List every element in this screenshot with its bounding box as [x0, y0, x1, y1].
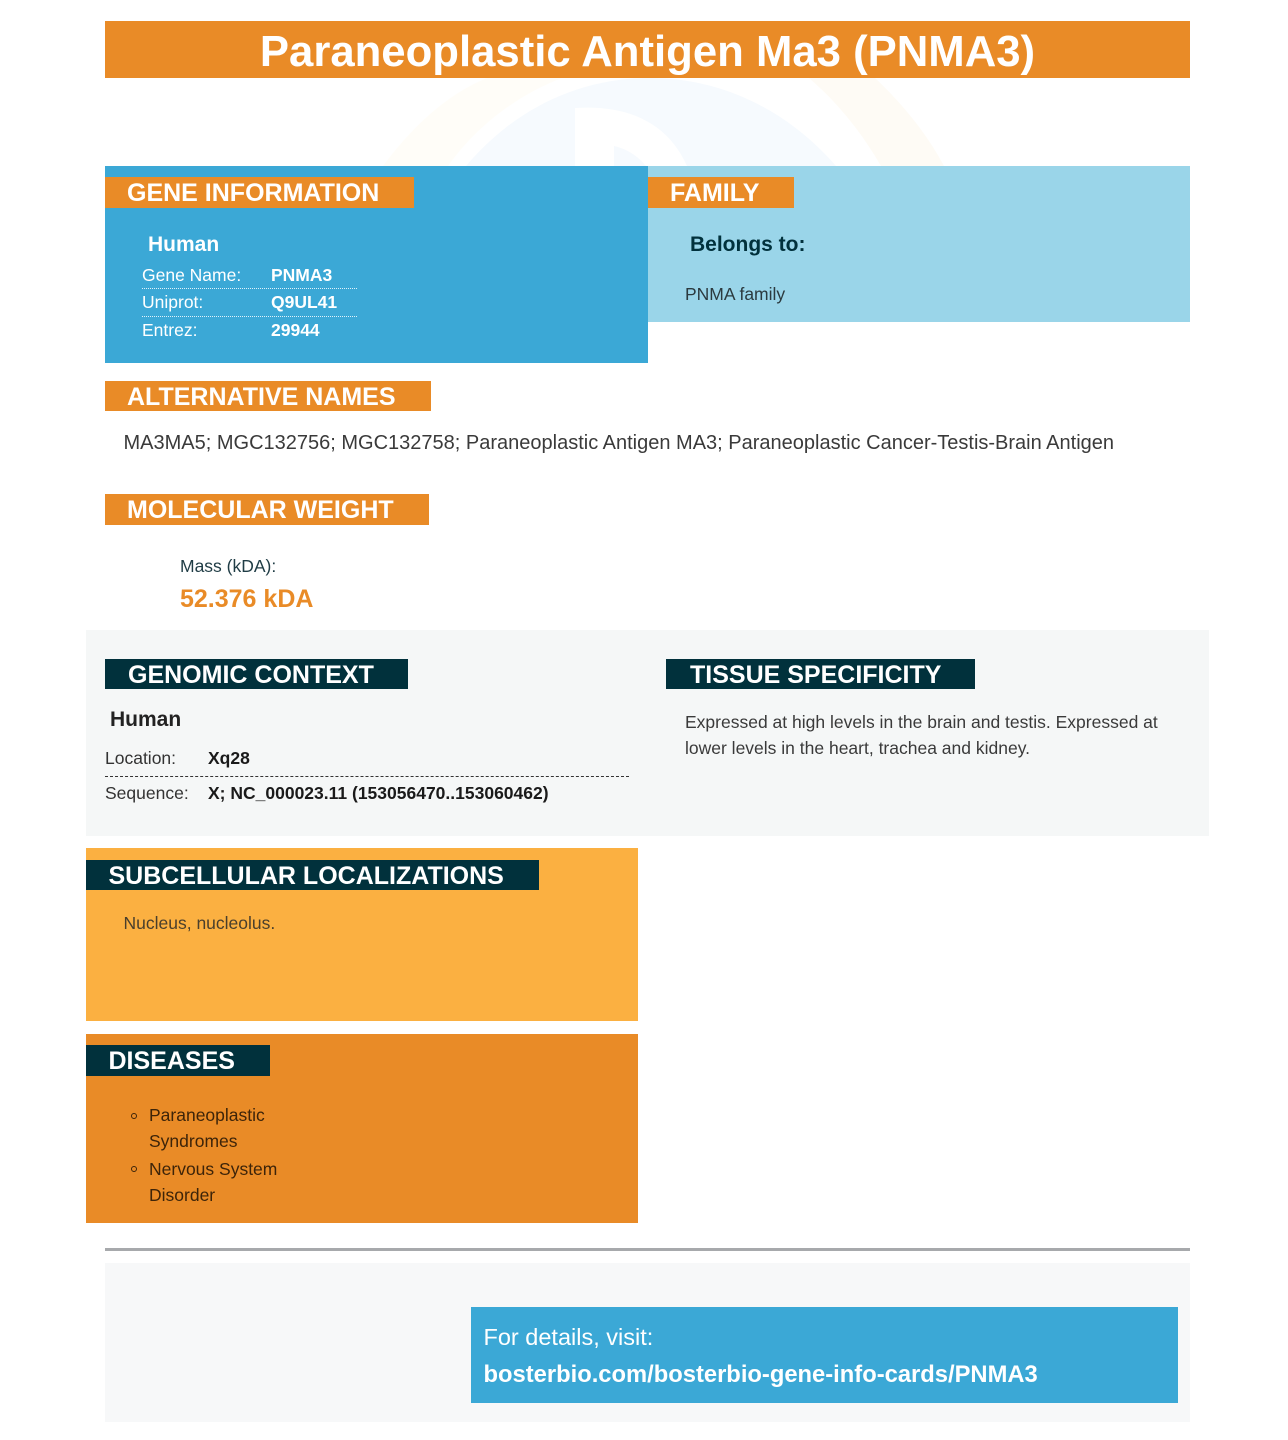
- genomic table: Location:: [105, 748, 176, 768]
- localization text: Nucleus, nucleolus.: [124, 913, 275, 933]
- mass label: Mass (kDA):: [180, 556, 276, 576]
- heading: diseases: DISEASES: [108, 1047, 235, 1075]
- gene info table: Q9UL41: [271, 292, 337, 312]
- panel: genomic context and tissue specificity: [86, 630, 1209, 836]
- footer panel: [105, 1263, 1190, 1422]
- heading: gene information: GENE INFORMATION: [127, 179, 379, 207]
- heading: subcellular localizations: SUBCELLULAR LOCALIZATIONS: [108, 862, 504, 890]
- disease item: Disorder: [149, 1185, 215, 1205]
- panel: gene information: [105, 166, 648, 363]
- tissue specificity text: lower levels in the heart, trachea and kidney.: [685, 738, 1030, 758]
- heading: tissue specificity: TISSUE SPECIFICITY: [690, 661, 941, 689]
- heading: diseases: [86, 1045, 270, 1076]
- tissue specificity text: [685, 712, 1158, 758]
- tissue specificity text: Expressed at high levels in the brain and testis. Expressed at: [685, 712, 1158, 732]
- alternative names text: MA3MA5; MGC132756; MGC132758; Paraneoplastic Antigen MA3; Paraneoplastic Cancer-Testis-Brain Antigen: [124, 432, 1114, 454]
- genomic table: [105, 748, 629, 803]
- title banner: [105, 21, 1190, 78]
- bullet: [131, 1166, 137, 1172]
- panel: subcellular localizations: [86, 848, 638, 1021]
- gene info table: [142, 265, 357, 340]
- species label: Human: [148, 233, 219, 256]
- gene info table: 29944: [271, 320, 320, 340]
- disease item: [149, 1159, 277, 1205]
- url: bosterbio.com/bosterbio-gene-info-cards/PNMA3: [484, 1361, 1038, 1388]
- belongs to label: Belongs to:: [690, 233, 806, 256]
- disease item: Syndromes: [149, 1131, 238, 1151]
- gene info table: Gene Name:: [142, 265, 241, 285]
- gene info table: Entrez:: [142, 320, 197, 340]
- disease list: [131, 1105, 277, 1205]
- disease item: [149, 1105, 265, 1151]
- disease item: Paraneoplastic: [149, 1105, 265, 1125]
- species label: Human: [110, 708, 181, 731]
- heading: molecular weight: MOLECULAR WEIGHT: [127, 496, 394, 524]
- genomic table: X; NC_000023.11 (153056470..153060462): [208, 783, 549, 803]
- heading: family: [648, 177, 794, 208]
- visit label: For details, visit:: [484, 1324, 653, 1350]
- gene info table: Uniprot:: [142, 292, 203, 312]
- heading: genomic context: GENOMIC CONTEXT: [128, 661, 374, 689]
- panel: diseases: [86, 1034, 638, 1223]
- mass value: 52.376 kDA: [180, 585, 313, 613]
- watermark logo: [466, 78, 944, 166]
- genomic table: Sequence:: [105, 783, 189, 803]
- bullet: [131, 1113, 137, 1119]
- disease item: Nervous System: [149, 1159, 277, 1179]
- heading: alternative names: ALTERNATIVE NAMES: [127, 383, 396, 411]
- title banner: Paraneoplastic Antigen Ma3 (PNMA3): [260, 27, 1035, 76]
- panel: family: [648, 166, 1190, 322]
- call to action box: [471, 1307, 1178, 1403]
- family text: PNMA family: [685, 284, 785, 304]
- genomic table: Xq28: [208, 748, 250, 768]
- heading: family: FAMILY: [670, 179, 759, 207]
- gene info table: PNMA3: [271, 265, 332, 285]
